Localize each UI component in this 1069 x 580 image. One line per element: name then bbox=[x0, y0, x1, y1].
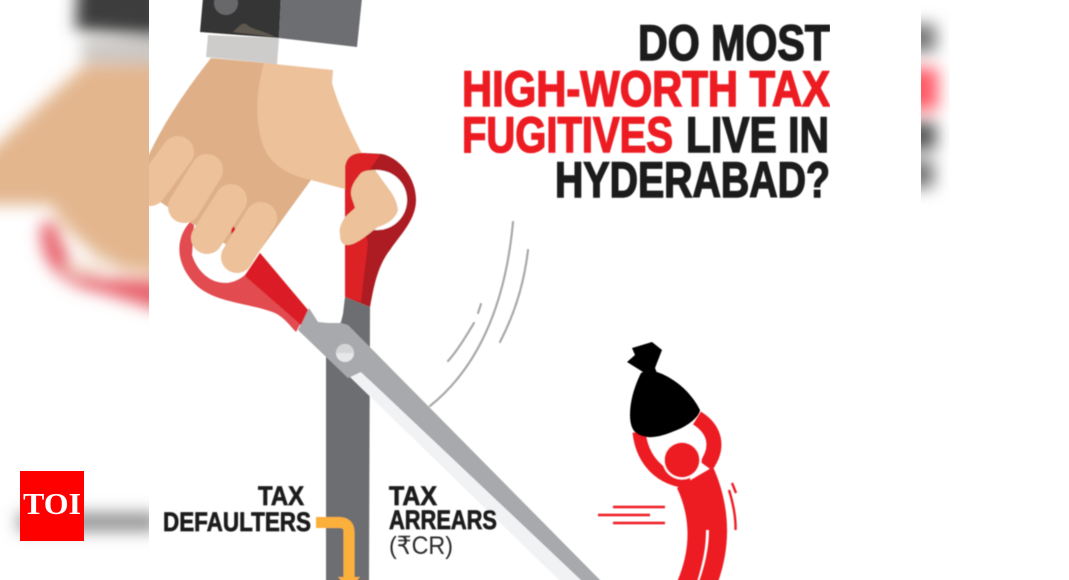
red flecks between fingers bbox=[231, 224, 236, 234]
central white panel bbox=[149, 0, 921, 580]
shirt cuff bbox=[206, 35, 279, 64]
title bbox=[462, 15, 830, 208]
thumb bbox=[340, 170, 398, 245]
label: tax arrears in crore: ARREARS bbox=[389, 505, 497, 535]
title: LIVE IN bbox=[686, 107, 829, 163]
TOI logo: TOI bbox=[23, 486, 81, 521]
figure body bbox=[639, 418, 727, 580]
right scissor handle bbox=[345, 153, 416, 307]
label: tax defaulters: TAX bbox=[258, 481, 304, 511]
fingers bbox=[150, 152, 261, 257]
blurred backdrop: right strip bbox=[900, 24, 938, 188]
arrow: defaulters bbox=[316, 522, 360, 580]
hand gripping scissors bbox=[140, 58, 416, 332]
title: HIGH-WORTH TAX bbox=[462, 61, 830, 117]
label: tax defaulters bbox=[163, 485, 312, 532]
motion lines of the scissor bbox=[430, 222, 528, 406]
running figure with money bag bbox=[598, 342, 736, 580]
scissor strap: grey tape being cut bbox=[326, 297, 370, 580]
title: DO MOST bbox=[638, 15, 830, 71]
TOI logo bbox=[20, 471, 84, 541]
label: tax defaulters: DEFAULTERS bbox=[163, 507, 311, 537]
label: tax arrears in crore: TAX bbox=[389, 481, 437, 511]
blurred backdrop: left strip bbox=[0, 0, 165, 531]
suit sleeve bbox=[200, 0, 362, 47]
back of hand bbox=[140, 58, 311, 253]
main illustration and text bbox=[140, 0, 830, 580]
title: HYDERABAD? bbox=[555, 152, 830, 208]
label: tax arrears in crore bbox=[389, 481, 497, 560]
label: tax arrears in crore: (₹CR) bbox=[389, 532, 453, 560]
scissors blades bbox=[298, 308, 602, 580]
title: FUGITIVES bbox=[462, 107, 673, 163]
speed lines bbox=[598, 483, 736, 530]
light side of hand and wrist bbox=[258, 63, 362, 190]
left scissor handle bbox=[179, 222, 308, 332]
money bag bbox=[627, 342, 700, 437]
